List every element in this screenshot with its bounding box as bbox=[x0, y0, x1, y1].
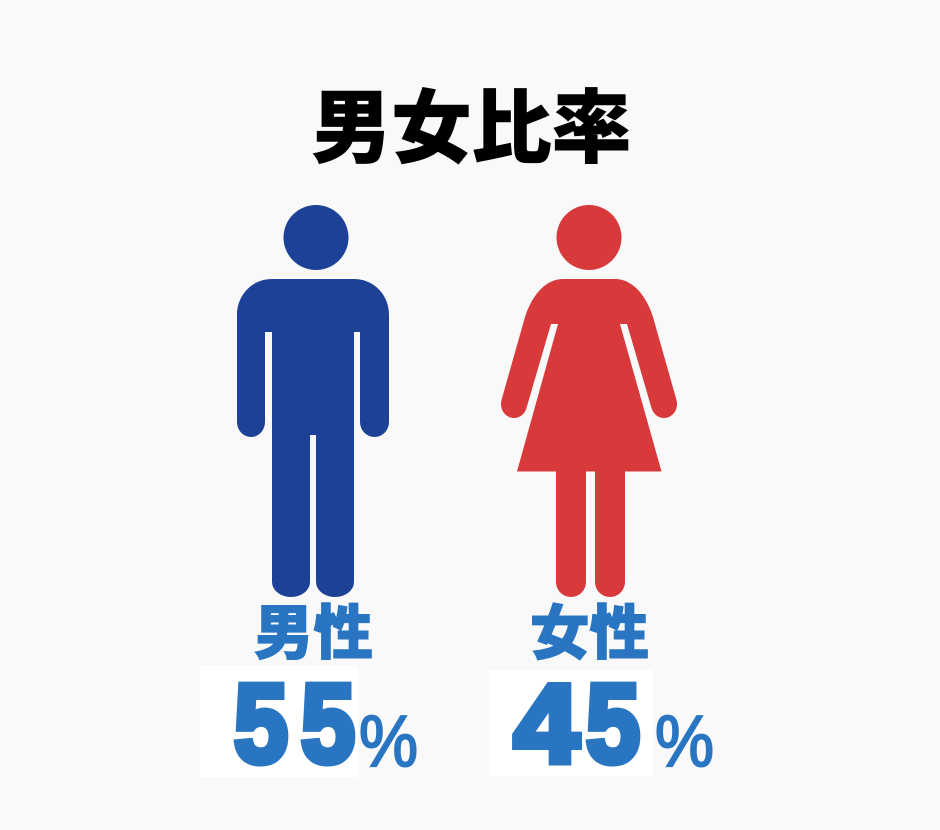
female percentage: 4 bbox=[514, 662, 579, 786]
male percentage: % bbox=[359, 702, 418, 782]
female percentage: % bbox=[655, 702, 714, 782]
icon: male figure bbox=[237, 205, 389, 597]
icon: female figure bbox=[501, 205, 677, 597]
male percentage: 5 bbox=[301, 662, 355, 786]
male percentage bbox=[200, 662, 418, 786]
female percentage: 5 bbox=[586, 662, 640, 786]
label: male: 男性 bbox=[254, 600, 373, 667]
female percentage bbox=[490, 662, 714, 786]
male percentage: 5 bbox=[234, 662, 288, 786]
label: female: 女性 bbox=[530, 600, 649, 667]
title: 男女比率 bbox=[312, 84, 632, 173]
